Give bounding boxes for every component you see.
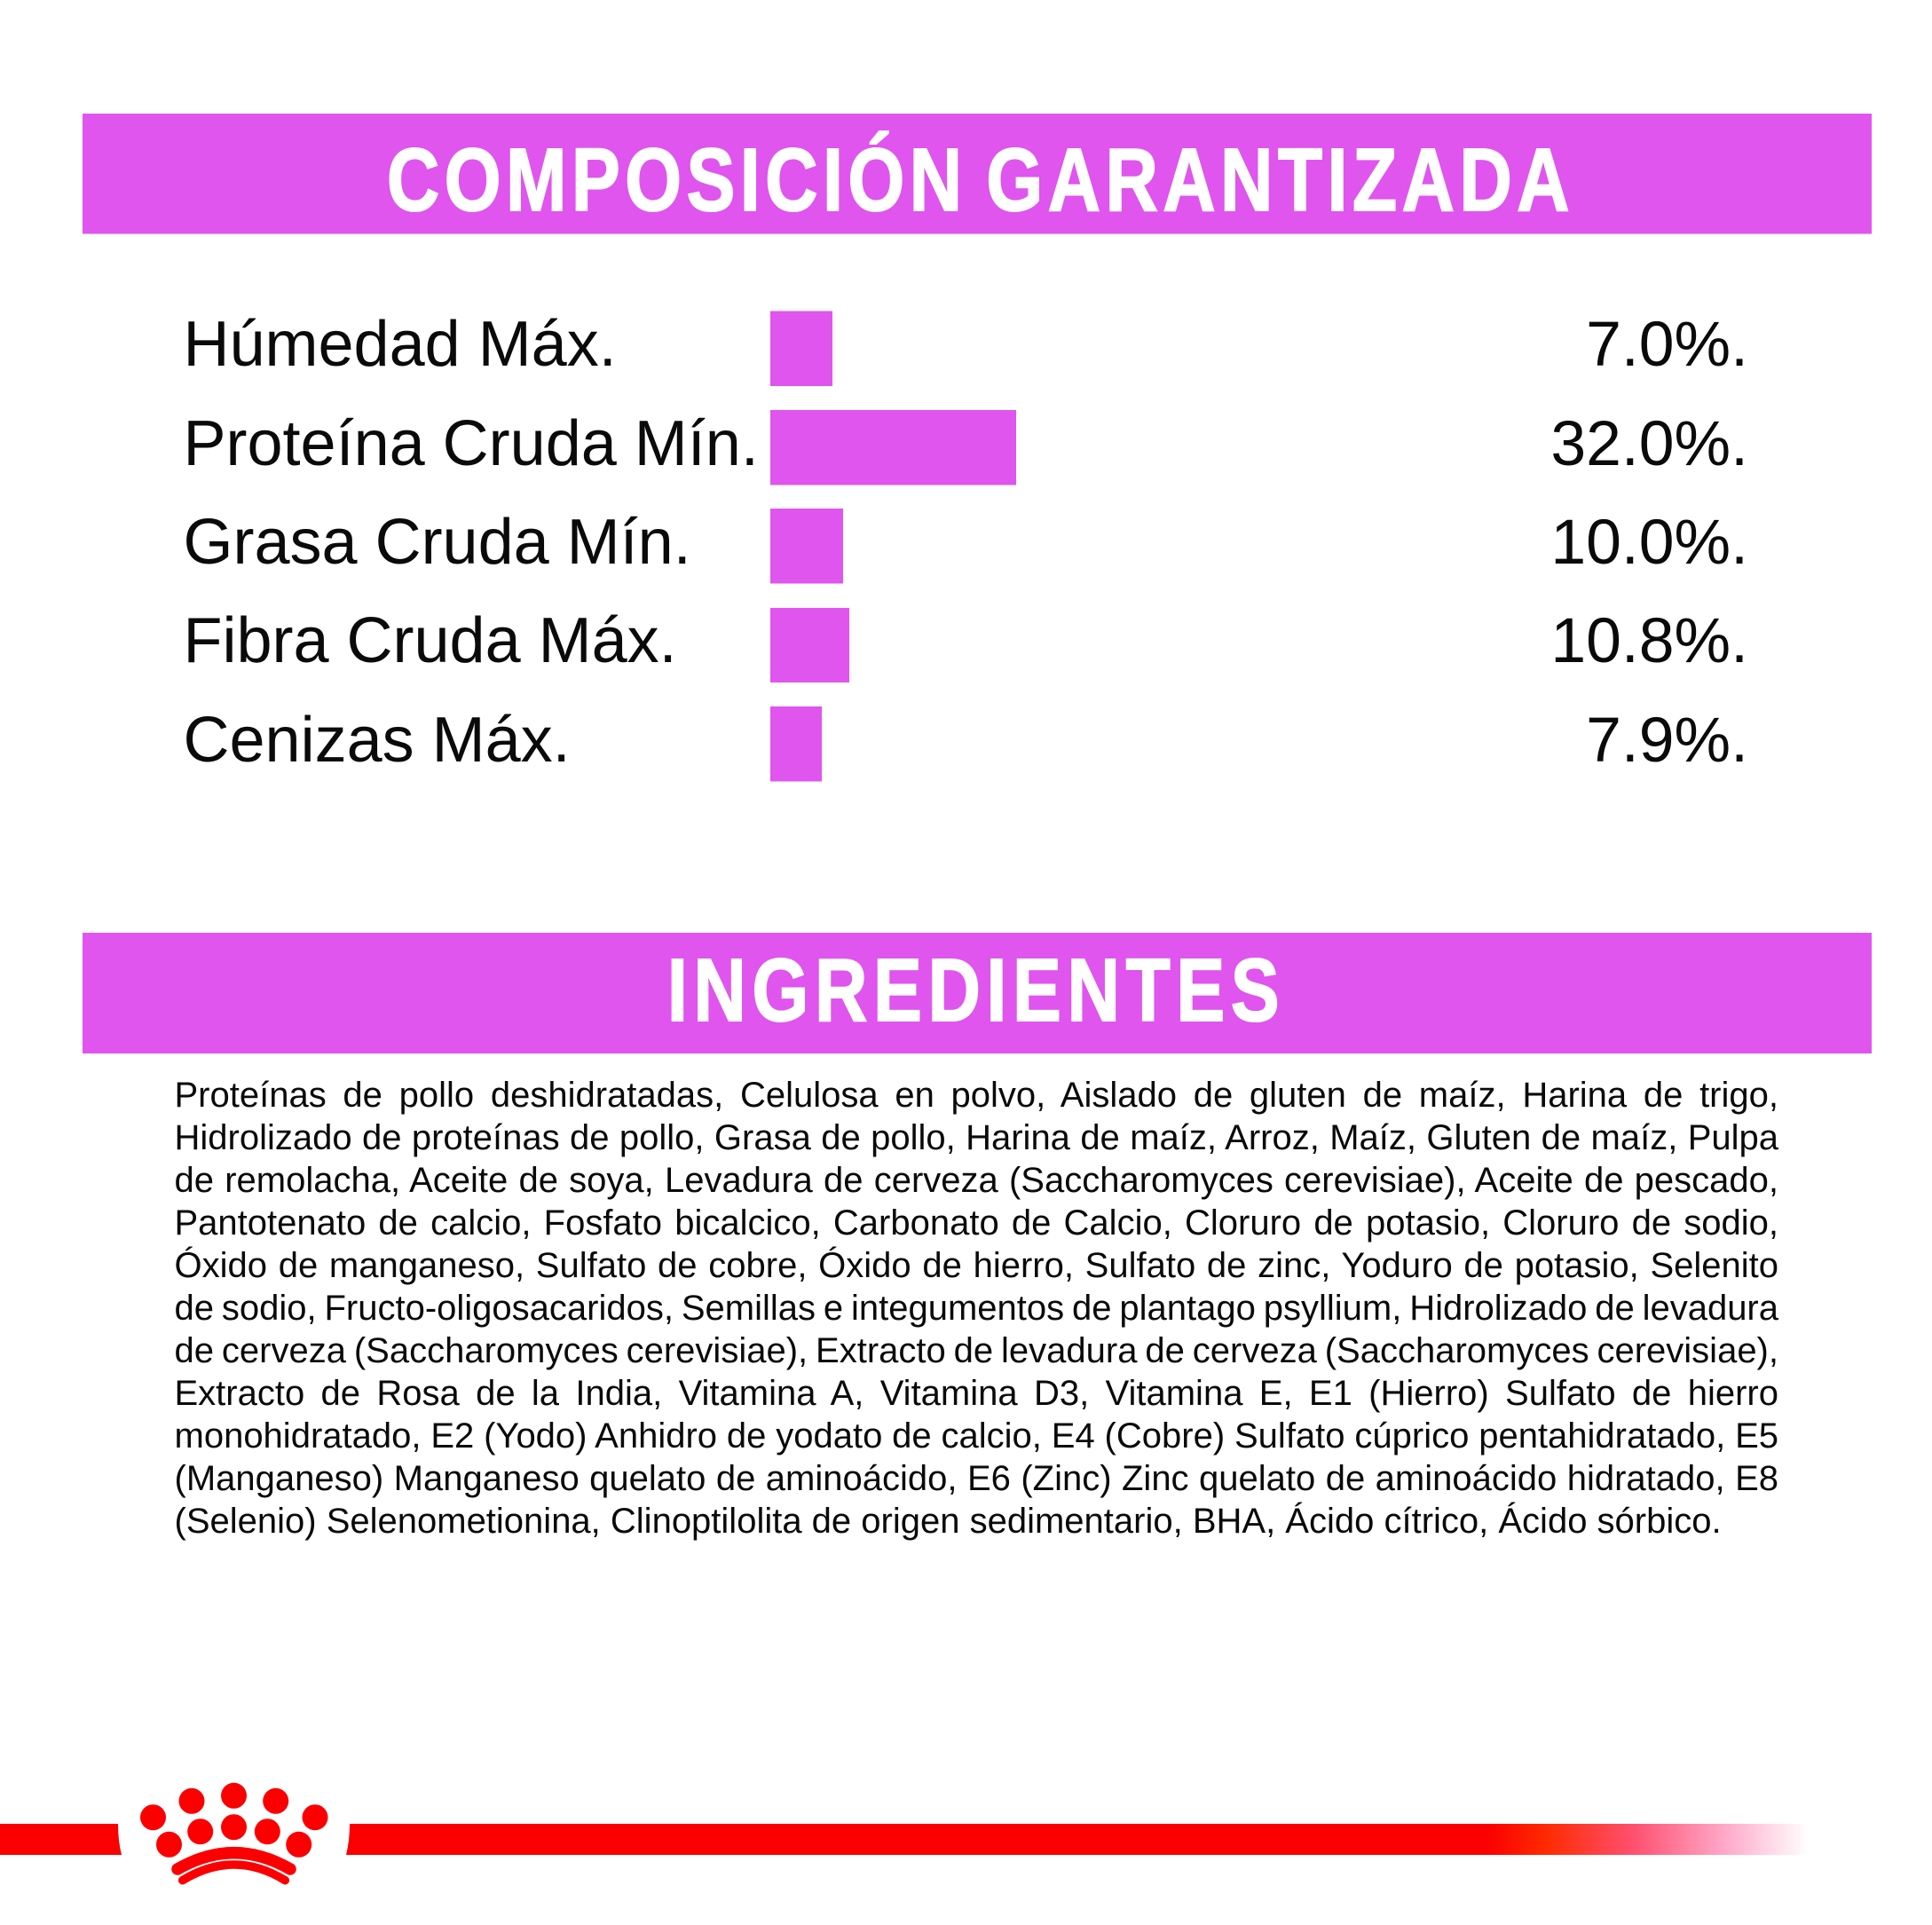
row: fibra: 10.8%.	[1550, 605, 1748, 676]
row: fibra	[183, 605, 1748, 682]
ingredients text block: de sodio, Fructo-oligosacaridos, Semillas e integumentos de plantago psyllium, Hidrolizado de levadura	[174, 1289, 1778, 1328]
ingredients text block: Pantotenato de calcio, Fosfato bicalcico, Carbonato de Calcio, Cloruro de potasio, Cloruro de sodio,	[174, 1203, 1778, 1243]
ingredients text block: de cerveza (Saccharomyces cerevisiae), Extracto de levadura de cerveza (Saccharomyces cerevisiae),	[174, 1331, 1778, 1370]
row: fibra: Fibra Cruda Máx.	[183, 605, 677, 676]
ingredients text block	[174, 1076, 1778, 1541]
header banner: ingredientes: INGREDIENTES	[667, 941, 1280, 1040]
ingredients text block: monohidratado, E2 (Yodo) Anhidro de yodato de calcio, E4 (Cobre) Sulfato cúprico pentahidratado, E5	[174, 1416, 1778, 1456]
icon: royal canin crown	[140, 1783, 328, 1881]
ingredients text block: Proteínas de pollo deshidratadas, Celulosa en polvo, Aislado de gluten de maíz, Harina de trigo,	[174, 1076, 1778, 1115]
ingredients text block: (Selenio) Selenometionina, Clinoptilolita de origen sedimentario, BHA, Ácido cítrico, Ácido sórbico.	[174, 1502, 1722, 1541]
header banner: ingredientes	[83, 933, 1872, 1053]
row: proteina: 32.0%.	[1550, 408, 1748, 479]
row: humedad	[183, 309, 1748, 386]
row: cenizas: 7.9%.	[1586, 705, 1748, 776]
footer red band left	[0, 1824, 122, 1855]
header banner: composición garantizada: COMPOSICIÓN GARANTIZADA	[387, 130, 1569, 230]
row: grasa: Grasa Cruda Mín.	[183, 507, 691, 578]
ingredients text block: Extracto de Rosa de la India, Vitamina A, Vitamina D3, Vitamina E, E1 (Hierro) Sulfato de hierro	[174, 1374, 1778, 1413]
row: cenizas	[183, 705, 1748, 781]
row: cenizas: Cenizas Máx.	[183, 705, 571, 776]
ingredients text block: de remolacha, Aceite de soya, Levadura de cerveza (Saccharomyces cerevisiae), Aceite de pescado,	[174, 1161, 1778, 1200]
row: proteina	[183, 408, 1748, 485]
row: grasa: 10.0%.	[1550, 507, 1748, 578]
row: proteina: Proteína Cruda Mín.	[183, 408, 759, 479]
ingredients text block: Óxido de manganeso, Sulfato de cobre, Óxido de hierro, Sulfato de zinc, Yoduro de potasio, Selenito	[174, 1246, 1778, 1285]
row: humedad: 7.0%.	[1586, 309, 1748, 380]
ingredients text block: Hidrolizado de proteínas de pollo, Grasa de pollo, Harina de maíz, Arroz, Maíz, Gluten de maíz, Pulpa	[174, 1118, 1778, 1157]
row: humedad: Húmedad Máx.	[183, 309, 617, 380]
row: grasa	[183, 507, 1748, 584]
footer red band right with fade	[346, 1824, 1809, 1855]
header banner: composición garantizada	[83, 114, 1872, 234]
ingredients text block: (Manganeso) Manganeso quelato de aminoácido, E6 (Zinc) Zinc quelato de aminoácido hidratado, E8	[174, 1459, 1778, 1498]
